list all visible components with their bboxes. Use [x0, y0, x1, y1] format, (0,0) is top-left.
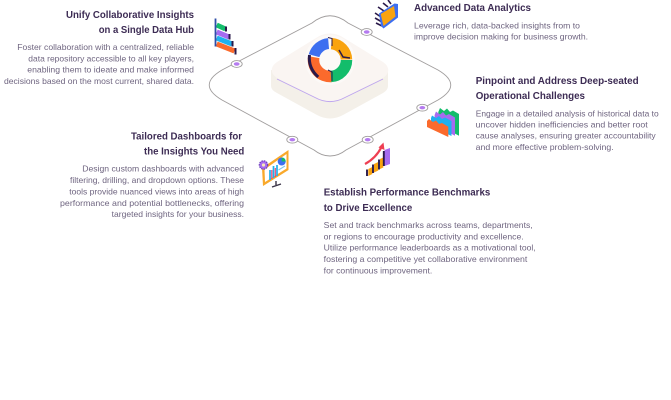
text block: Engage in a detailed analysis of historical data to — [476, 108, 659, 118]
icon: layered stepped charts — [427, 108, 459, 137]
text block — [4, 42, 194, 86]
central diamond loop — [209, 16, 451, 156]
heading: Establish Performance Benchmarks — [324, 188, 491, 198]
text block: Utilize performance leaderboards as a motivational tool, — [324, 243, 536, 253]
icon: processor chip — [375, 0, 398, 28]
icon: horizontal bars — [216, 18, 236, 54]
text block — [324, 220, 536, 275]
text block: uncover hidden inefficiencies and better root — [476, 119, 648, 129]
text block: enabling them to ideate and make informed — [27, 65, 194, 75]
text block: Foster collaboration with a centralized, reliable — [17, 42, 194, 52]
text block: data repository accessible to all key players, — [28, 53, 194, 63]
text block: or regions to encourage productivity and excellence. — [324, 232, 524, 242]
text block — [60, 164, 244, 219]
heading — [476, 76, 639, 102]
text block: fostering a competitive yet collaborative environment — [324, 254, 528, 264]
heading — [66, 10, 194, 36]
heading: to Drive Excellence — [324, 203, 413, 214]
text block: tools provide nuanced views into areas of high — [69, 187, 244, 197]
heading — [131, 132, 244, 158]
central platform — [271, 34, 388, 118]
heading — [324, 188, 491, 214]
text block: Leverage rich, data-backed insights from to — [414, 20, 580, 30]
text block: performance and potential bottlenecks, offering — [60, 198, 244, 208]
panel: establish performance benchmarks — [324, 188, 536, 275]
text block: decisions based on the most current, shared data. — [4, 76, 194, 86]
text block: Set and track benchmarks across teams, departments, — [324, 220, 533, 230]
heading: the Insights You Need — [144, 146, 244, 158]
connector nodes — [231, 29, 428, 143]
text block: targeted insights for your business. — [112, 209, 244, 219]
panel: pinpoint and address challenges — [476, 76, 659, 152]
text block: filtering, drilling, and dropdown options. These — [70, 175, 244, 185]
heading: Advanced Data Analytics — [414, 3, 531, 14]
panel: unify collaborative insights — [4, 10, 194, 86]
icon: dashboard monitor — [259, 150, 288, 187]
heading: Pinpoint and Address Deep-seated — [476, 76, 639, 87]
text block: and more effective problem-solving. — [476, 142, 614, 152]
panel: tailored dashboards — [60, 132, 244, 219]
text block: Design custom dashboards with advanced — [82, 164, 244, 174]
text block — [414, 20, 588, 42]
text block: cause analyses, ensuring greater accountability — [476, 131, 656, 141]
heading: on a Single Data Hub — [99, 25, 194, 36]
heading: Unify Collaborative Insights — [66, 10, 194, 21]
heading: Operational Challenges — [476, 91, 585, 102]
text block: for continuous improvement. — [324, 265, 432, 275]
heading: Tailored Dashboards for — [131, 132, 242, 142]
text block — [476, 108, 659, 152]
icon: circular cycle ring — [305, 35, 355, 85]
text block: improve decision making for business growth. — [414, 32, 588, 42]
icon: growth chart with arrow — [365, 142, 390, 176]
panel: advanced data analytics — [414, 3, 588, 42]
